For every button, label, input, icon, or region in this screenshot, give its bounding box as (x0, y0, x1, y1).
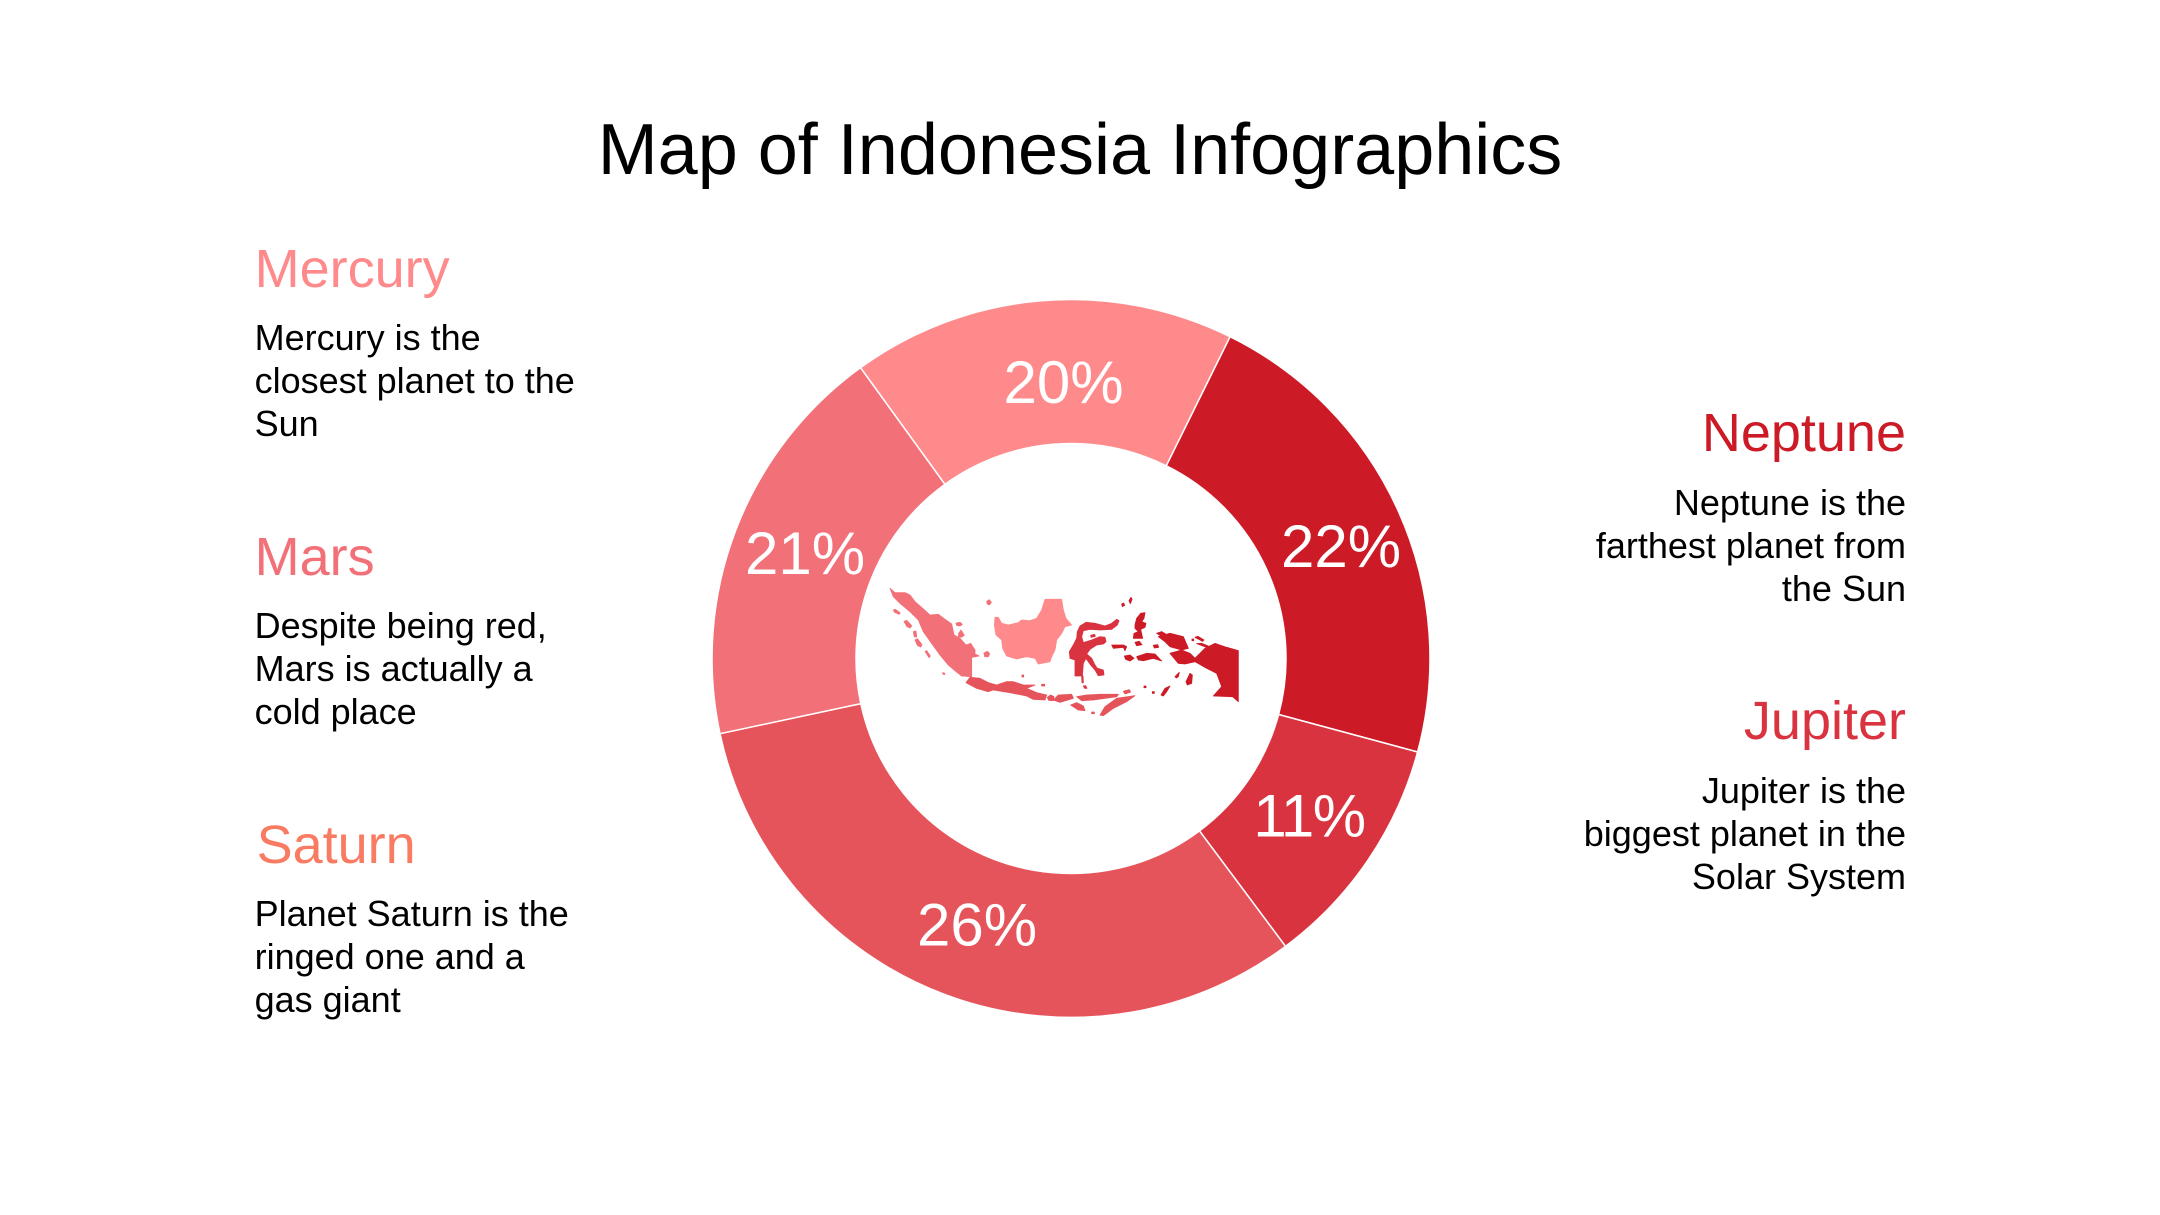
panel: Saturn (255, 815, 569, 1020)
region: Sumatra (890, 588, 991, 677)
segment: Jupiter 11% (1200, 714, 1418, 946)
heading: Jupiter: Jupiter (1744, 691, 1906, 751)
label: 21%: 21% (745, 520, 865, 587)
text: Saturn description: Planet Saturn is the (255, 893, 569, 934)
text: Mercury description: Sun (255, 403, 319, 444)
text: Mars description: Despite being red, (255, 605, 547, 646)
text: Saturn description: ringed one and a (255, 936, 526, 977)
text: Mars description: cold place (255, 691, 417, 732)
text: Jupiter description: biggest planet in the (1584, 813, 1906, 854)
text: Neptune description: Neptune is the (1674, 482, 1906, 523)
label: 11%: 11% (1253, 782, 1365, 850)
region: Java and Lesser Sunda (966, 675, 1135, 716)
region: Sulawesi (1069, 619, 1119, 688)
heading: Mercury: Mercury (255, 239, 450, 299)
segment: Saturn 26% (720, 704, 1286, 1017)
text: Jupiter description: Solar System (1692, 856, 1906, 897)
text: Neptune description: the Sun (1782, 568, 1906, 609)
text: Mars description: Mars is actually a (255, 648, 534, 689)
panel: Jupiter (1584, 691, 1906, 897)
text: Mercury description: Mercury is the (255, 317, 481, 358)
text: Mercury description: closest planet to the (255, 360, 575, 401)
heading: Saturn: Saturn (257, 815, 416, 875)
panel: Neptune (1596, 403, 1906, 609)
map of Indonesia (890, 588, 1238, 716)
label: 22%: 22% (1281, 513, 1401, 580)
label: 26%: 26% (917, 892, 1037, 958)
region: Kalimantan (994, 599, 1072, 664)
text: Saturn description: gas giant (255, 979, 401, 1020)
segment: Mars 21% (712, 368, 945, 734)
panel: Mercury (255, 239, 575, 444)
heading: Mars: Mars (255, 527, 375, 587)
label: 20%: 20% (1003, 349, 1124, 416)
donut chart (712, 300, 1430, 1017)
heading: Neptune: Neptune (1702, 403, 1906, 463)
region: Maluku and Papua (1112, 597, 1238, 702)
text: Neptune description: farthest planet from (1596, 525, 1906, 566)
text: Jupiter description: Jupiter is the (1702, 770, 1906, 811)
segment: Mercury 20% (860, 300, 1230, 484)
title: Map of Indonesia Infographics (598, 110, 1562, 190)
segment: Neptune 22% (1166, 337, 1430, 752)
panel: Mars (255, 527, 547, 732)
